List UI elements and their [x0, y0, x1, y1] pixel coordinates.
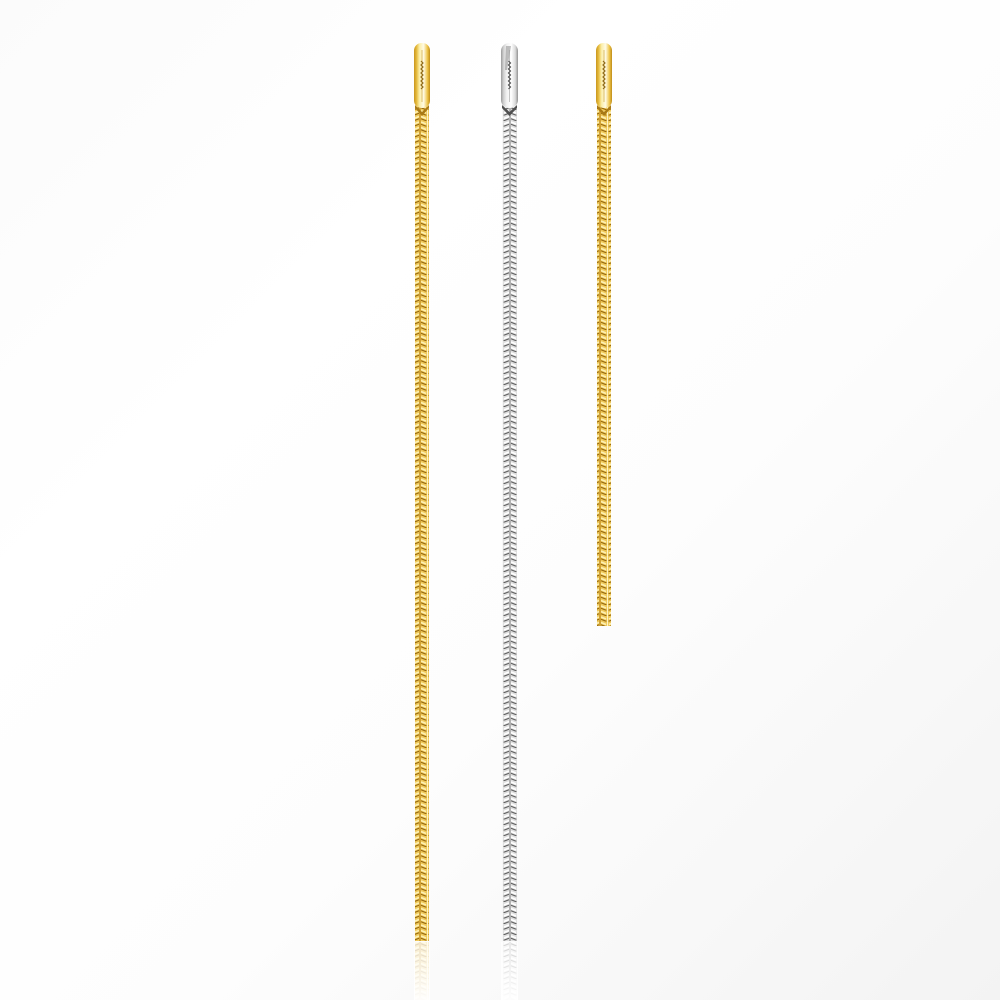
chain reflection — [501, 942, 518, 1000]
gold chain, long — [414, 43, 430, 1000]
chain reflection — [414, 942, 430, 1000]
end cap — [414, 43, 430, 116]
chain body — [502, 106, 517, 941]
end cap — [596, 43, 612, 116]
chain body — [415, 106, 429, 941]
chain body — [597, 106, 611, 626]
gold chain, short — [596, 43, 612, 626]
silver chain, long — [501, 43, 518, 1000]
end cap — [501, 43, 518, 116]
